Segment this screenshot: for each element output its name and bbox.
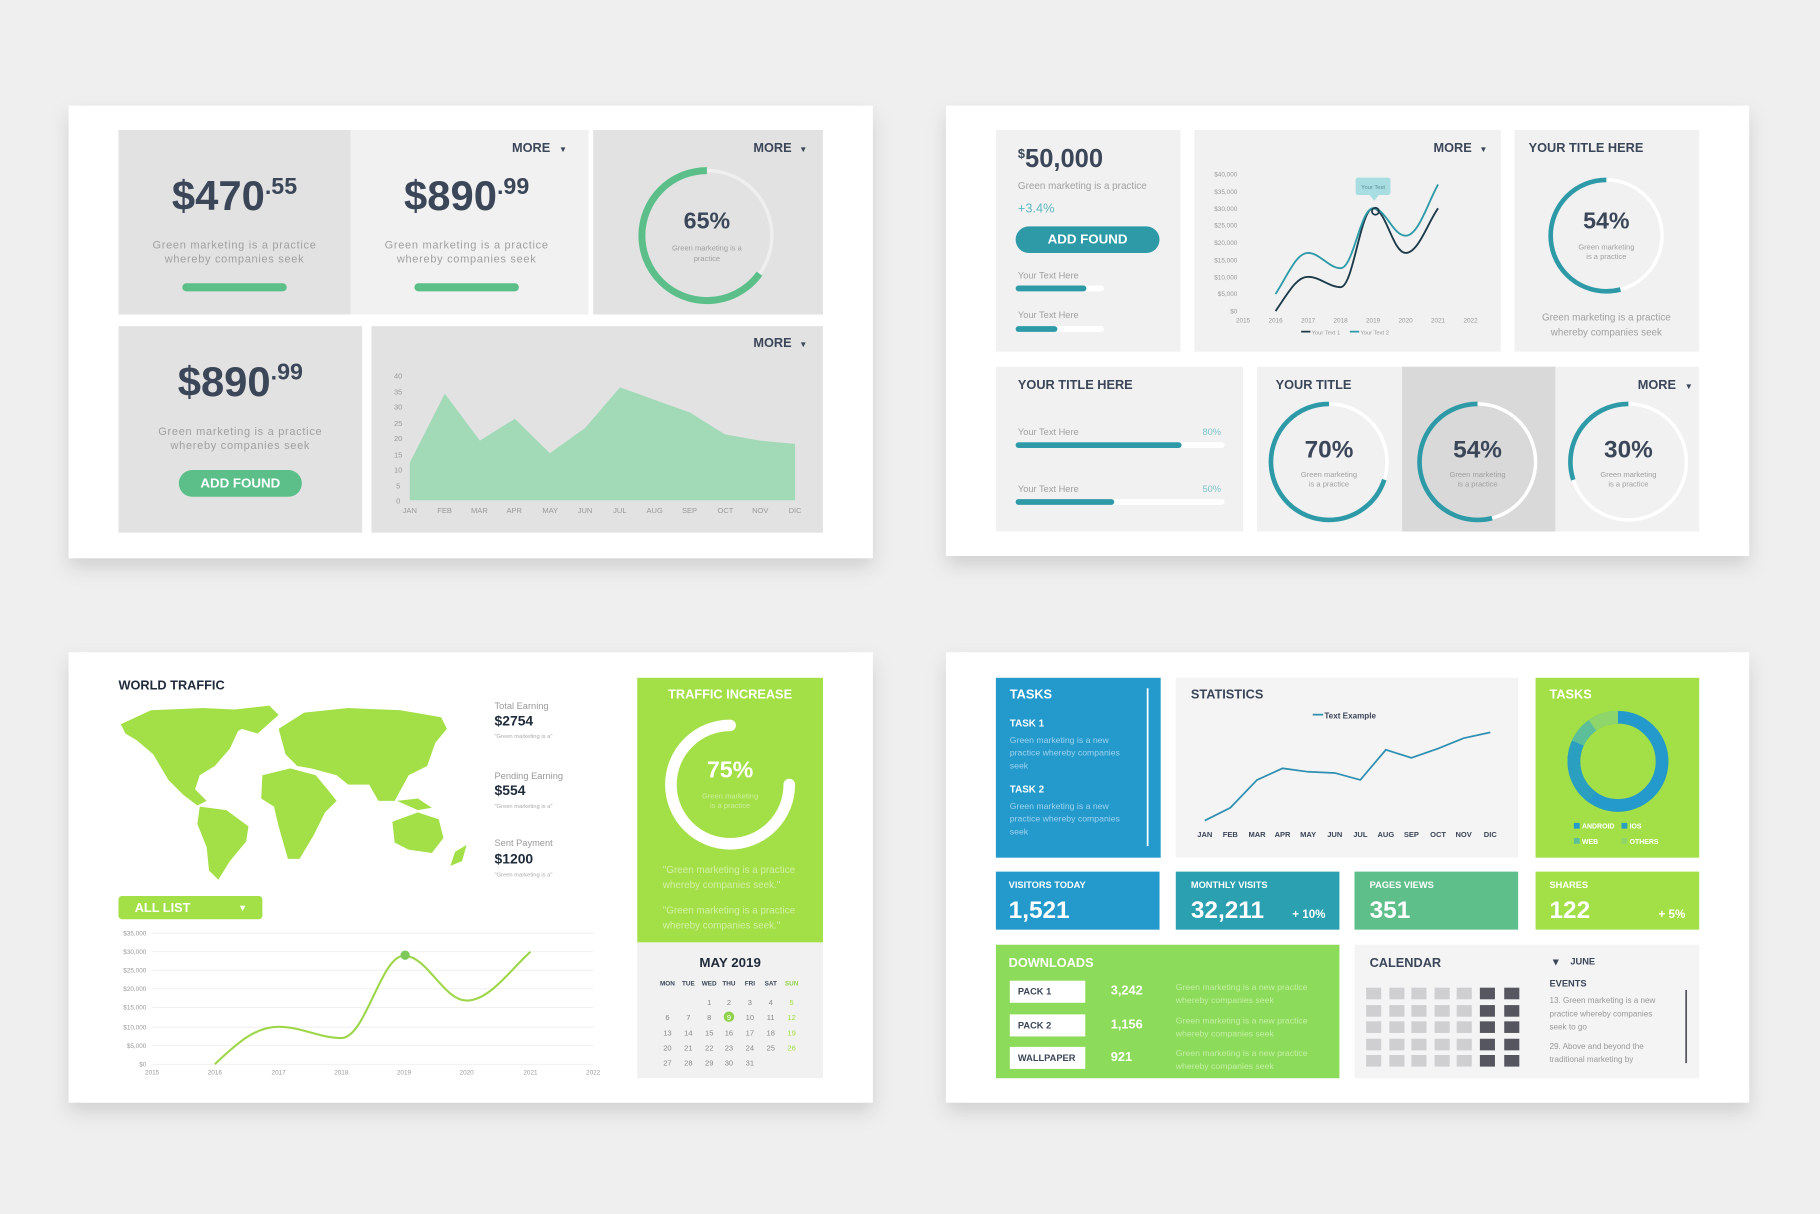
panel: area chart: ▼ (799, 340, 807, 349)
panel: 50,000: Your Text Here (1018, 310, 1079, 320)
panel: statistics chart: OCT (1430, 830, 1446, 839)
panel: calendar may 2019: 30 (725, 1058, 733, 1067)
panel: 50,000: $ (1018, 146, 1025, 161)
panel: traffic increase: whereby companies seek." (662, 880, 781, 891)
panel: line chart: ▼ (1479, 145, 1487, 154)
panel: price with add found: whereby companies seek (170, 440, 310, 452)
panel: area chart: 20 (394, 434, 402, 443)
stat: visitors today: VISITORS TODAY (1009, 880, 1087, 890)
panel: progress bars: YOUR TITLE HERE (1018, 377, 1133, 392)
world map (121, 706, 467, 880)
panel: 50,000 (996, 130, 1180, 352)
panel: three rings: Green marketing (1600, 470, 1656, 479)
panel: traffic increase: whereby companies seek." (662, 920, 781, 931)
panel: statistics chart: JUL (1353, 830, 1368, 839)
panel: calendar grid and events: 13. Green marketing is a new (1549, 996, 1656, 1005)
stat: shares: 122 (1549, 897, 1590, 924)
stats: earnings: "Green marketing is a" (495, 804, 552, 810)
panel: statistics chart: DIC (1484, 830, 1497, 839)
panel: calendar grid and events: JUNE (1570, 956, 1595, 966)
panel: tasks donut: ANDROID (1582, 824, 1614, 831)
stat: pages views: 351 (1370, 897, 1410, 924)
panel: calendar may 2019: THU (722, 980, 736, 987)
stats: earnings (495, 701, 563, 878)
panel: calendar may 2019: 18 (767, 1028, 775, 1037)
panel: downloads: DOWNLOADS (1009, 955, 1094, 970)
panel: calendar may 2019: 1 (707, 998, 711, 1007)
panel: downloads: 1,156 (1111, 1016, 1143, 1031)
panel: three rings: YOUR TITLE (1276, 377, 1351, 392)
panel: calendar may 2019: 4 (769, 998, 773, 1007)
panel: calendar grid and events: practice whereby companies (1549, 1010, 1652, 1019)
panel: calendar grid and events: traditional marketing by (1549, 1055, 1634, 1064)
panel: area chart: 5 (396, 482, 400, 491)
panel: 54% ring (1515, 130, 1699, 352)
stat: visitors today (996, 872, 1160, 930)
panel: calendar may 2019: MAY 2019 (699, 955, 761, 970)
panel: area chart: 10 (394, 465, 402, 474)
panel: progress bars: Your Text Here (1018, 484, 1079, 494)
panel: area chart: APR (506, 506, 523, 515)
panel: price with add found: $890 (178, 358, 271, 405)
panel: price with add found: .99 (271, 359, 303, 385)
stat: monthly visits: MONTHLY VISITS (1191, 880, 1268, 890)
panel: price 890.99: .99 (497, 173, 529, 199)
line chart: traffic: 2021 (523, 1070, 538, 1077)
panel: line chart: Your Text (1361, 185, 1385, 191)
panel: calendar may 2019: 14 (684, 1028, 693, 1037)
panel: downloads: Green marketing is a new practice (1176, 1048, 1308, 1058)
panel: calendar grid and events: 29. Above and beyond the (1549, 1042, 1644, 1051)
panel: 54% ring: 54% (1583, 208, 1630, 234)
panel: traffic increase: "Green marketing is a practice (663, 865, 796, 876)
panel: area chart: JUL (613, 506, 627, 515)
panel: progress bars: 50% (1202, 484, 1221, 494)
panel: calendar may 2019: 7 (686, 1013, 690, 1022)
panel: statistics chart: Text Example (1324, 711, 1377, 720)
panel: calendar may 2019: TUE (682, 980, 695, 987)
panel: calendar may 2019: 29 (705, 1058, 713, 1067)
panel: calendar may 2019: 25 (767, 1043, 775, 1052)
panel: tasks donut: OTHERS (1630, 839, 1659, 846)
dropdown: all list: ALL LIST (135, 900, 191, 915)
panel: downloads (996, 945, 1339, 1078)
panel: downloads: whereby companies seek (1175, 1061, 1274, 1071)
panel: tasks blue (996, 678, 1161, 858)
panel: statistics chart: SEP (1404, 830, 1419, 839)
panel: 50,000: ADD FOUND (1048, 232, 1128, 247)
stat: shares: SHARES (1549, 880, 1588, 890)
panel: tasks donut: TASKS (1549, 687, 1592, 702)
panel: area chart: DIC (789, 506, 802, 515)
panel: calendar may 2019: 20 (663, 1043, 672, 1052)
panel: line chart: 2018 (1333, 318, 1348, 325)
panel: 65% ring: Green marketing is a (672, 244, 743, 253)
panel: 50,000: Green marketing is a practice (1018, 181, 1147, 192)
panel: price 890.99 (351, 130, 589, 315)
panel: price 470.55: $470 (172, 172, 265, 219)
panel: 54% ring: Green marketing is a practice (1542, 312, 1671, 323)
panel: calendar may 2019: 3 (748, 998, 752, 1007)
panel: price 890.99: MORE (512, 140, 550, 155)
stats: earnings: $2754 (495, 712, 533, 728)
panel: tasks blue: seek (1010, 826, 1029, 836)
panel: statistics chart: STATISTICS (1191, 687, 1263, 702)
panel: line chart: Your Text 1 (1312, 330, 1340, 336)
panel: traffic increase: Green marketing (702, 792, 758, 801)
panel: 65% ring: MORE (753, 140, 792, 155)
panel: calendar may 2019: 24 (746, 1043, 754, 1052)
panel: line chart: 2019 (1366, 318, 1381, 325)
dropdown: all list: ▼ (238, 903, 247, 913)
panel: calendar may 2019: 6 (665, 1013, 670, 1022)
line chart: traffic: $10,000 (123, 1024, 147, 1031)
panel: line chart: $30,000 (1214, 206, 1238, 213)
line chart: traffic: $35,000 (123, 930, 147, 937)
panel: 50,000: +3.4% (1018, 200, 1054, 215)
panel: line chart: MORE (1433, 140, 1472, 155)
line chart: traffic: 2017 (272, 1070, 286, 1077)
stats: earnings: $1200 (495, 850, 533, 866)
panel: tasks blue: TASKS (1010, 687, 1052, 702)
panel: calendar may 2019: SAT (765, 980, 777, 987)
panel: calendar may 2019: 23 (725, 1043, 733, 1052)
panel: statistics chart: JAN (1197, 830, 1212, 839)
panel: price 890.99: ▼ (559, 145, 567, 154)
panel: statistics chart: FEB (1223, 830, 1238, 839)
panel: tasks blue: seek (1010, 760, 1029, 770)
panel: tasks donut: WEB (1582, 839, 1598, 846)
panel: calendar may 2019: 13 (663, 1028, 672, 1037)
panel: traffic increase: is a practice (710, 801, 750, 810)
panel: 54% ring: Green marketing (1578, 243, 1634, 252)
panel: tasks blue: TASK 1 (1010, 719, 1045, 730)
line chart: traffic: 2015 (145, 1070, 160, 1077)
panel: calendar may 2019: 11 (767, 1013, 775, 1022)
panel: 65% ring: ▼ (799, 145, 807, 154)
panel: price 890.99: $890 (404, 172, 497, 219)
panel: three rings: 54% (1453, 436, 1502, 463)
panel: area chart: MAR (471, 506, 488, 515)
panel: 54% ring: YOUR TITLE HERE (1529, 140, 1643, 155)
panel: 54% ring: is a practice (1586, 252, 1626, 261)
panel: line chart: 2021 (1431, 318, 1446, 325)
panel: three rings: is a practice (1309, 479, 1349, 488)
panel: line chart (1194, 130, 1501, 352)
panel: three rings: MORE (1638, 377, 1676, 392)
panel: downloads: PACK 1 (1018, 987, 1051, 997)
stat: monthly visits: 32,211 (1191, 897, 1264, 924)
panel: three rings: 30% (1604, 436, 1653, 463)
panel: tasks blue: Green marketing is a new (1010, 801, 1110, 811)
panel: downloads: 921 (1111, 1049, 1132, 1064)
panel: calendar may 2019: 15 (705, 1028, 713, 1037)
panel: downloads: PACK 2 (1018, 1020, 1051, 1030)
panel: calendar grid and events: seek to go (1549, 1022, 1587, 1031)
panel: area chart: 25 (394, 419, 402, 428)
panel: downloads: Green marketing is a new practice (1176, 982, 1308, 992)
line chart: traffic (123, 930, 601, 1077)
panel: three rings (1257, 367, 1699, 532)
panel: price 890.99: Green marketing is a practice (385, 239, 549, 251)
stats: earnings: Total Earning (495, 701, 549, 711)
line chart: traffic: $0 (139, 1062, 147, 1069)
dropdown: all list (118, 896, 262, 919)
stats: earnings: $554 (495, 782, 526, 798)
panel: price 470.55: .55 (265, 173, 297, 199)
panel: price with add found: Green marketing is a practice (158, 426, 322, 438)
stat: pages views: PAGES VIEWS (1370, 880, 1434, 890)
panel: calendar grid and events: EVENTS (1549, 979, 1587, 989)
panel: line chart: $35,000 (1214, 189, 1238, 196)
panel: calendar grid and events: ▼ (1551, 958, 1561, 969)
panel: statistics chart: MAY (1300, 830, 1316, 839)
stats: earnings: "Green marketing is a" (495, 734, 552, 740)
line chart: traffic: 2018 (334, 1070, 349, 1077)
panel: line chart: Your Text 2 (1360, 330, 1389, 336)
panel: statistics chart: AUG (1377, 830, 1394, 839)
card: top-right dashboard (946, 106, 1749, 556)
line chart: traffic: $5,000 (127, 1043, 147, 1050)
panel: area chart: 0 (396, 497, 400, 506)
panel: statistics chart: JUN (1327, 830, 1342, 839)
stat: monthly visits: + 10% (1292, 908, 1325, 921)
panel: downloads: whereby companies seek (1175, 995, 1274, 1005)
panel: statistics chart: APR (1275, 830, 1291, 839)
panel: tasks blue: practice whereby companies (1010, 748, 1121, 758)
panel: three rings: is a practice (1608, 479, 1649, 488)
panel: 50,000: 50,000 (1025, 145, 1103, 173)
panel: traffic increase (637, 678, 823, 942)
panel: area chart (371, 326, 823, 533)
panel: three rings: is a practice (1457, 479, 1498, 488)
panel: statistics chart (1176, 678, 1518, 858)
panel: progress bars: 80% (1202, 427, 1221, 437)
panel: area chart: 30 (394, 403, 402, 412)
panel: calendar may 2019: 21 (684, 1043, 693, 1052)
line chart: traffic: $20,000 (123, 986, 147, 993)
panel: traffic increase: "Green marketing is a practice (663, 905, 796, 916)
panel: area chart: JUN (578, 506, 592, 515)
line chart: traffic: 2020 (460, 1070, 474, 1077)
stats: earnings: Pending Earning (495, 771, 563, 781)
panel: calendar may 2019 (637, 942, 823, 1078)
panel: area chart: OCT (718, 506, 734, 515)
panel: 50,000: Your Text Here (1018, 271, 1079, 281)
panel: traffic increase: 75% (707, 757, 754, 783)
panel: price 470.55: whereby companies seek (164, 253, 304, 265)
panel: area chart: 40 (394, 371, 402, 380)
panel: line chart: $5,000 (1218, 291, 1238, 298)
panel: area chart: JAN (403, 506, 417, 515)
panel: area chart: MAY (542, 506, 558, 515)
panel: area chart: 35 (394, 388, 402, 397)
panel: 65% ring: 65% (684, 208, 730, 234)
panel: calendar may 2019: 12 (787, 1013, 796, 1022)
panel: calendar may 2019: 26 (787, 1043, 796, 1052)
panel: price 890.99: whereby companies seek (396, 253, 536, 265)
panel: 65% ring: practice (694, 254, 720, 263)
panel: calendar may 2019: 22 (705, 1043, 713, 1052)
panel: area chart: FEB (437, 506, 452, 515)
panel: line chart: 2016 (1268, 318, 1283, 325)
panel: calendar may 2019: 10 (746, 1013, 754, 1022)
panel: three rings: ▼ (1685, 382, 1693, 391)
panel: area chart: MORE (753, 335, 792, 350)
panel: statistics chart: NOV (1455, 830, 1472, 839)
panel: calendar may 2019: 5 (790, 998, 794, 1007)
panel: calendar may 2019: 17 (746, 1028, 754, 1037)
panel: tasks blue: TASK 2 (1010, 785, 1045, 796)
panel: calendar may 2019: 2 (727, 998, 731, 1007)
panel: line chart: $25,000 (1214, 222, 1238, 229)
panel: area chart: 15 (394, 450, 402, 459)
panel: calendar may 2019: 9 (727, 1013, 731, 1022)
panel: three rings: 70% (1305, 436, 1354, 463)
card: bottom-right dashboard (946, 652, 1749, 1103)
panel: calendar may 2019: SUN (785, 980, 799, 987)
stat: pages views (1355, 872, 1518, 930)
panel: line chart: 2020 (1398, 318, 1413, 325)
panel: 65% ring (593, 130, 823, 315)
panel: three rings: Green marketing (1301, 470, 1357, 479)
panel: calendar may 2019: MON (660, 980, 675, 987)
panel: progress bars: Your Text Here (1018, 427, 1079, 437)
panel: statistics chart: MAR (1248, 830, 1266, 839)
panel: price with add found: ADD FOUND (200, 475, 281, 490)
line chart: traffic: 2022 (586, 1070, 601, 1077)
panel: calendar may 2019: 31 (746, 1058, 754, 1067)
panel: calendar may 2019: WED (702, 980, 717, 987)
panel: price with add found (118, 326, 362, 533)
panel: calendar may 2019: 27 (663, 1058, 672, 1067)
panel: calendar may 2019: 19 (787, 1028, 796, 1037)
panel: tasks donut (1536, 678, 1699, 858)
panel: line chart: 2017 (1301, 318, 1316, 325)
panel: line chart: $15,000 (1214, 257, 1238, 264)
line chart: traffic: $15,000 (123, 1005, 147, 1012)
stat: shares (1536, 872, 1699, 930)
panel: line chart: $0 (1230, 308, 1238, 315)
panel: traffic increase: TRAFFIC INCREASE (668, 687, 792, 702)
card: bottom-left world traffic (69, 652, 873, 1103)
card: top-left dashboard (69, 106, 873, 558)
panel: calendar may 2019: 16 (725, 1028, 733, 1037)
panel: calendar may 2019: FRI (745, 980, 755, 987)
panel: three rings: Green marketing (1449, 470, 1506, 479)
panel: line chart: 2022 (1463, 318, 1478, 325)
line chart: traffic: $25,000 (123, 968, 147, 975)
panel: calendar grid and events: CALENDAR (1370, 955, 1441, 970)
panel: line chart: 2015 (1236, 318, 1251, 325)
panel: tasks blue: Green marketing is a new (1010, 735, 1110, 745)
panel: downloads: 3,242 (1111, 983, 1143, 998)
panel: downloads: Green marketing is a new practice (1176, 1016, 1308, 1026)
line chart: traffic: 2016 (208, 1070, 222, 1077)
panel: area chart: AUG (647, 506, 663, 515)
stat: visitors today: 1,521 (1009, 897, 1070, 924)
panel: calendar may 2019: 8 (707, 1013, 711, 1022)
line chart: traffic: $30,000 (123, 949, 147, 956)
panel: downloads: whereby companies seek (1175, 1028, 1274, 1038)
panel: area chart: SEP (682, 506, 697, 515)
stats: earnings: "Green marketing is a" (495, 872, 552, 878)
panel: progress bars (996, 367, 1243, 532)
line chart: traffic: 2019 (397, 1070, 412, 1077)
panel: calendar may 2019: 28 (684, 1058, 693, 1067)
stat: shares: + 5% (1659, 908, 1685, 921)
panel: line chart: $20,000 (1214, 240, 1238, 247)
stat: monthly visits (1176, 872, 1339, 930)
panel: area chart: NOV (752, 506, 768, 515)
panel: tasks donut: IOS (1630, 824, 1642, 831)
panel: 54% ring: whereby companies seek (1550, 327, 1662, 338)
panel: price 470.55 (118, 130, 351, 315)
panel: calendar grid and events (1355, 945, 1699, 1078)
panel: downloads: WALLPAPER (1018, 1053, 1076, 1063)
stats: earnings: Sent Payment (495, 838, 553, 848)
panel: tasks blue: practice whereby companies (1010, 814, 1121, 824)
panel: price 470.55: Green marketing is a practice (152, 239, 317, 251)
heading: world traffic: WORLD TRAFFIC (118, 677, 225, 692)
panel: line chart: $10,000 (1214, 275, 1238, 282)
panel: line chart: $40,000 (1214, 171, 1238, 178)
